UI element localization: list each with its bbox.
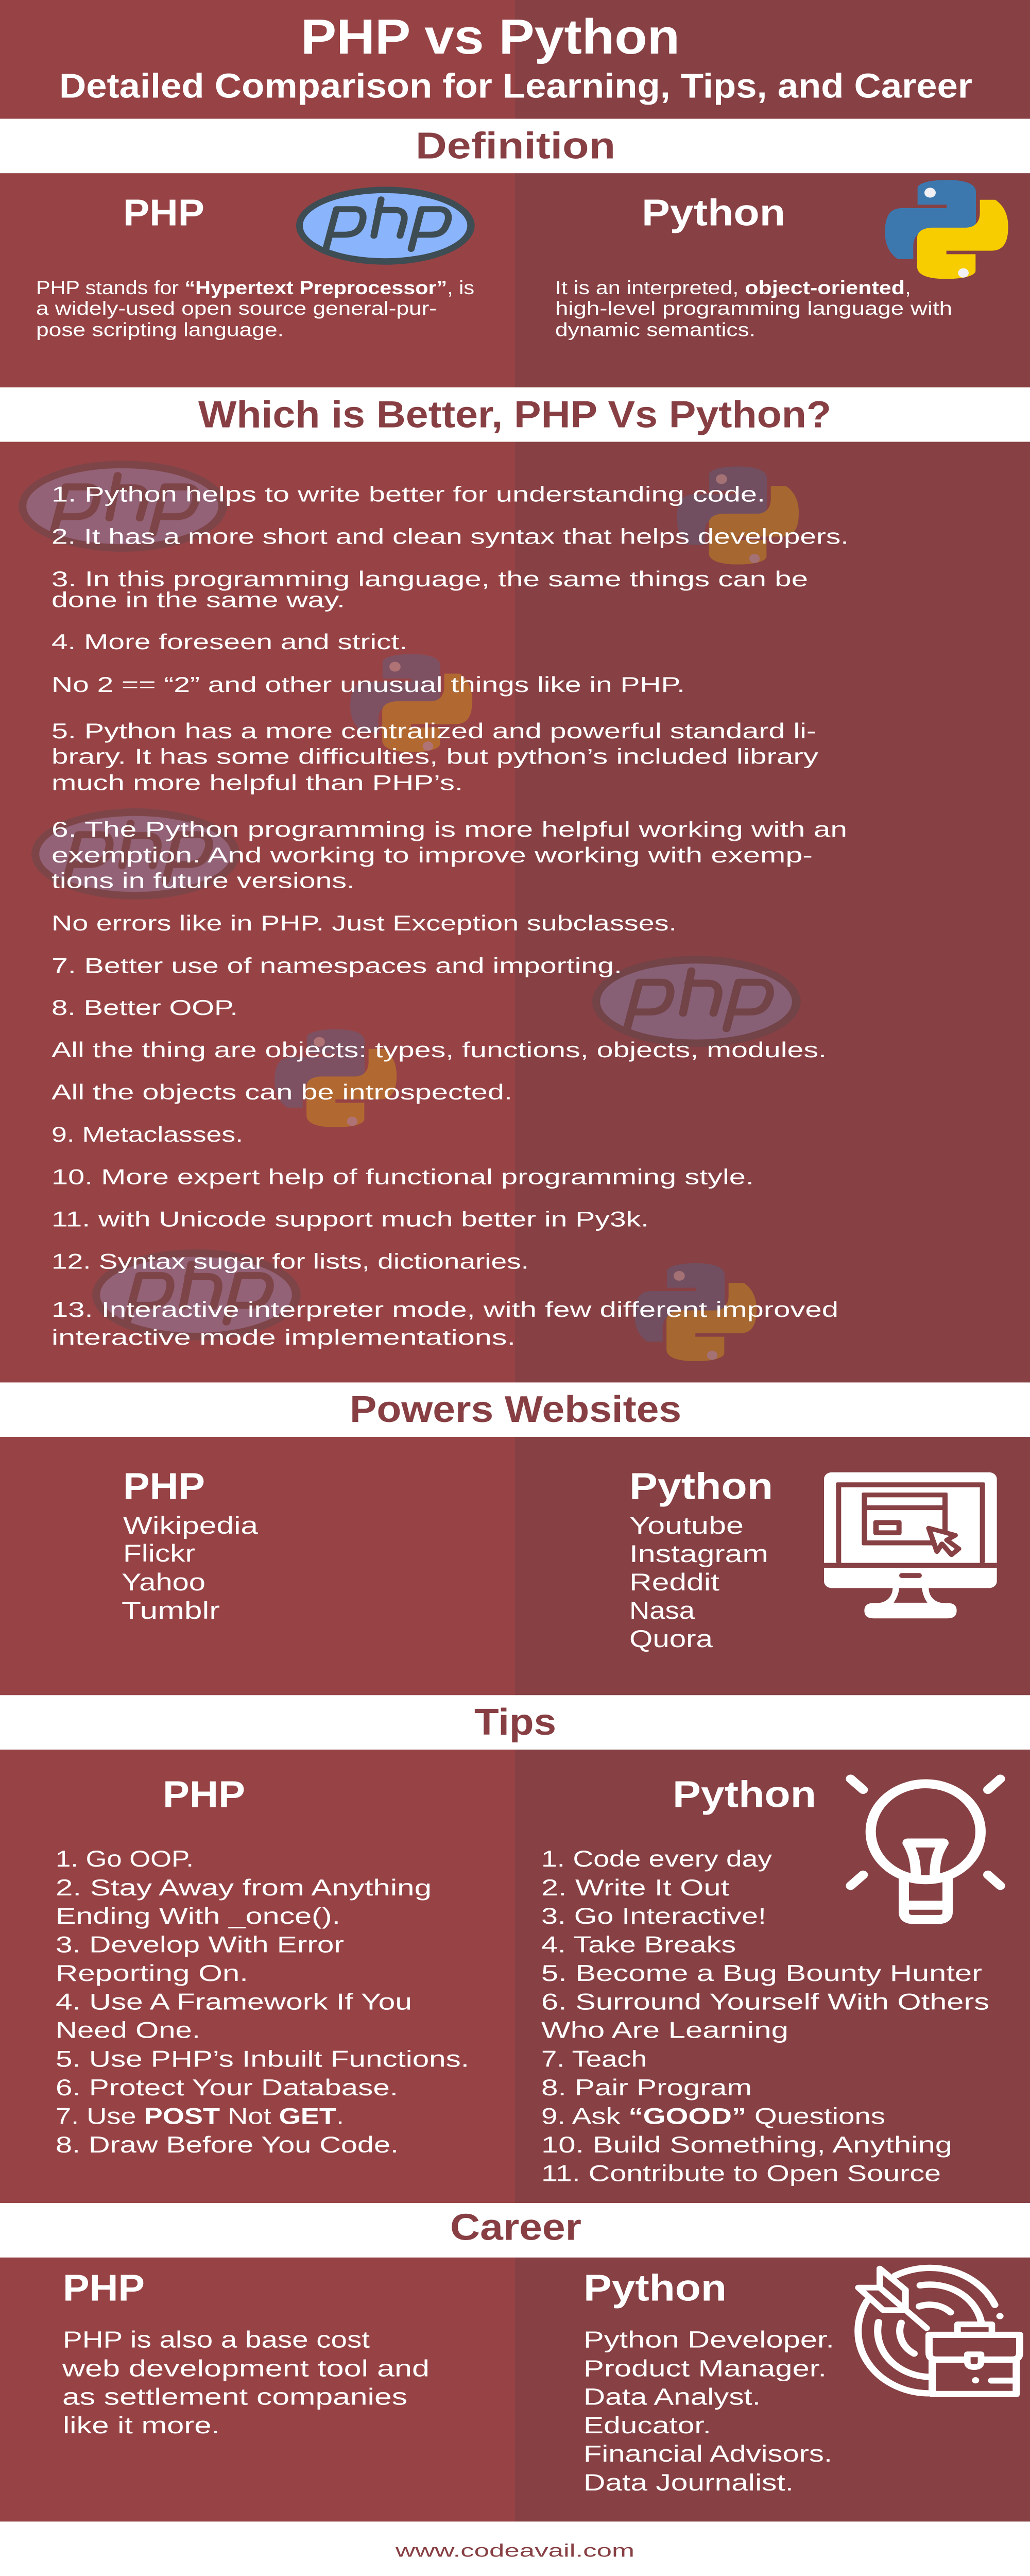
- Python column heading: Python: [642, 191, 785, 233]
- PHP websites list: Wikipedia: [123, 1512, 259, 1539]
- panel: definition: [0, 173, 1030, 387]
- numbered list of reasons: 2. It has a more short and clean syntax that helps developers.: [52, 524, 849, 549]
- Python definition text: high-level programming language with: [555, 298, 952, 319]
- PHP column heading: PHP: [123, 191, 204, 233]
- Python career list: Python Developer.: [583, 2327, 834, 2353]
- numbered list of reasons: 9. Metaclasses.: [52, 1122, 243, 1147]
- PHP career text: as settlement companies: [62, 2384, 407, 2410]
- Python tips list: 1. Code every day: [541, 1846, 772, 1872]
- numbered list of reasons: exemption. And working to improve working with exemp-: [52, 843, 813, 867]
- subtitle: Detailed Comparison for Learning, Tips, and Career: [59, 67, 972, 105]
- PHP definition text: [36, 278, 474, 341]
- PHP definition text: PHP stands for “Hypertext Preprocessor”, is: [36, 278, 474, 298]
- Python tips list: 2. Write It Out: [541, 1875, 729, 1901]
- PHP definition text: pose scripting language.: [36, 319, 284, 341]
- panel: powers websites: [0, 1437, 1030, 1695]
- PHP column heading: PHP: [63, 2267, 145, 2309]
- Python definition text: It is an interpreted, object-oriented,: [555, 278, 911, 298]
- Python websites list: Instagram: [629, 1540, 768, 1567]
- numbered list of reasons: tions in future versions.: [52, 869, 355, 893]
- PHP tips list: 8. Draw Before You Code.: [56, 2132, 399, 2158]
- PHP tips list: 1. Go OOP.: [56, 1846, 194, 1872]
- PHP tips list: 5. Use PHP’s Inbuilt Functions.: [56, 2046, 469, 2072]
- numbered list of reasons: brary. It has some difficulties, but python’s included library: [52, 744, 819, 769]
- Python websites list: Youtube: [629, 1512, 744, 1539]
- Python career list: Data Journalist.: [583, 2470, 794, 2496]
- Python definition text: dynamic semantics.: [555, 319, 756, 341]
- PHP websites list: Tumblr: [122, 1597, 220, 1624]
- Python column heading: Python: [583, 2267, 727, 2309]
- numbered list of reasons: 8. Better OOP.: [52, 995, 238, 1020]
- numbered list of reasons: 7. Better use of namespaces and importing.: [52, 954, 622, 978]
- numbered list of reasons: much more helpful than PHP’s.: [52, 770, 463, 795]
- Python tips list: 4. Take Breaks: [541, 1933, 736, 1958]
- heading: Career: Career: [450, 2206, 581, 2248]
- numbered list of reasons: 11. with Unicode support much better in Py3k.: [52, 1207, 649, 1231]
- numbered list of reasons: No 2 == “2” and other unusual things like in PHP.: [52, 672, 685, 697]
- panel: career: [0, 2258, 1030, 2521]
- Python websites list: Nasa: [629, 1597, 695, 1624]
- Python tips list: 7. Teach: [541, 2046, 647, 2072]
- numbered list of reasons: [52, 482, 849, 1349]
- PHP career text: like it more.: [63, 2413, 220, 2438]
- PHP tips list: 3. Develop With Error: [56, 1933, 344, 1958]
- PHP career text: PHP is also a base cost: [63, 2327, 370, 2353]
- PHP column heading: PHP: [123, 1465, 205, 1507]
- numbered list of reasons: 6. The Python programming is more helpful working with an: [52, 817, 847, 841]
- icon: Python logo: [885, 180, 1008, 279]
- numbered list of reasons: interactive mode implementations.: [52, 1325, 516, 1349]
- icon: desktop monitor with browser window and cursor: [824, 1472, 997, 1618]
- title: PHP vs Python: [301, 9, 680, 64]
- PHP tips list: 6. Protect Your Database.: [56, 2075, 398, 2100]
- Python tips list: 11. Contribute to Open Source: [541, 2161, 941, 2187]
- PHP websites list: Flickr: [123, 1539, 195, 1567]
- footer: website URL: www.codeavail.com: [395, 2540, 634, 2561]
- PHP tips list: Reporting On.: [56, 1961, 248, 1986]
- PHP career text: [62, 2327, 430, 2438]
- Python websites list: Reddit: [629, 1568, 719, 1596]
- PHP websites list: Yahoo: [122, 1568, 205, 1596]
- PHP definition text: a widely-used open source general-pur-: [36, 298, 437, 319]
- Python tips list: 10. Build Something, Anything: [541, 2132, 952, 2158]
- panel: which is better: [0, 442, 1030, 1382]
- numbered list of reasons: 10. More expert help of functional programming style.: [52, 1164, 754, 1189]
- Python definition text: [555, 278, 952, 341]
- Python career list: [583, 2327, 834, 2496]
- heading: Tips: Tips: [474, 1701, 556, 1743]
- Python websites list: Quora: [629, 1625, 713, 1652]
- Python career list: Financial Advisors.: [583, 2441, 832, 2467]
- numbered list of reasons: 1. Python helps to write better for understanding code.: [52, 482, 765, 506]
- numbered list of reasons: 3. In this programming language, the same things can be: [52, 567, 808, 591]
- numbered list of reasons: done in the same way.: [52, 587, 345, 612]
- heading: Which is Better: Which is Better, PHP Vs Python?: [198, 394, 831, 435]
- Python tips list: Who Are Learning: [541, 2018, 788, 2043]
- PHP tips list: 2. Stay Away from Anything: [56, 1875, 432, 1901]
- PHP tips list: 4. Use A Framework If You: [56, 1990, 412, 2015]
- Python websites list: [629, 1512, 768, 1652]
- Python career list: Educator.: [583, 2413, 711, 2438]
- Python tips list: 3. Go Interactive!: [541, 1904, 766, 1929]
- icon: target with arrow and briefcase: [858, 2268, 1020, 2394]
- Python tips list: 9. Ask “GOOD” Questions: [541, 2104, 885, 2129]
- numbered list of reasons: 12. Syntax sugar for lists, dictionaries.: [52, 1249, 529, 1274]
- watermark logos: [19, 461, 801, 1361]
- PHP tips list: 7. Use POST Not GET.: [56, 2104, 344, 2129]
- Python tips list: 8. Pair Program: [541, 2075, 752, 2100]
- heading: Powers Websites: Powers Websites: [350, 1388, 681, 1430]
- Python tips list: [541, 1846, 989, 2187]
- icon: light bulb: [851, 1779, 1000, 1920]
- PHP tips list: Need One.: [56, 2018, 200, 2043]
- icon: PHP logo: [296, 187, 475, 265]
- PHP websites list: [122, 1512, 259, 1624]
- panel: title banner: [0, 0, 1030, 119]
- PHP tips list: [56, 1846, 469, 2158]
- numbered list of reasons: All the objects can be introspected.: [52, 1080, 512, 1104]
- numbered list of reasons: All the thing are objects: types, functions, objects, modules.: [52, 1038, 827, 1062]
- numbered list of reasons: 13. Interactive interpreter mode, with few different improved: [52, 1297, 838, 1321]
- PHP tips list: Ending With _once().: [56, 1904, 340, 1929]
- Python column heading: Python: [673, 1773, 816, 1815]
- numbered list of reasons: 4. More foreseen and strict.: [52, 630, 407, 654]
- Python career list: Product Manager.: [583, 2355, 827, 2382]
- panel: tips: [0, 1750, 1030, 2203]
- Python tips list: 5. Become a Bug Bounty Hunter: [541, 1961, 982, 1986]
- PHP column heading: PHP: [163, 1773, 245, 1815]
- Python career list: Data Analyst.: [583, 2384, 761, 2410]
- Python tips list: 6. Surround Yourself With Others: [541, 1990, 989, 2015]
- PHP career text: web development tool and: [62, 2355, 430, 2382]
- heading: Definition: Definition: [416, 124, 615, 166]
- numbered list of reasons: No errors like in PHP. Just Exception subclasses.: [52, 911, 677, 935]
- numbered list of reasons: 5. Python has a more centralized and powerful standard li-: [52, 719, 816, 743]
- Python column heading: Python: [629, 1465, 773, 1507]
